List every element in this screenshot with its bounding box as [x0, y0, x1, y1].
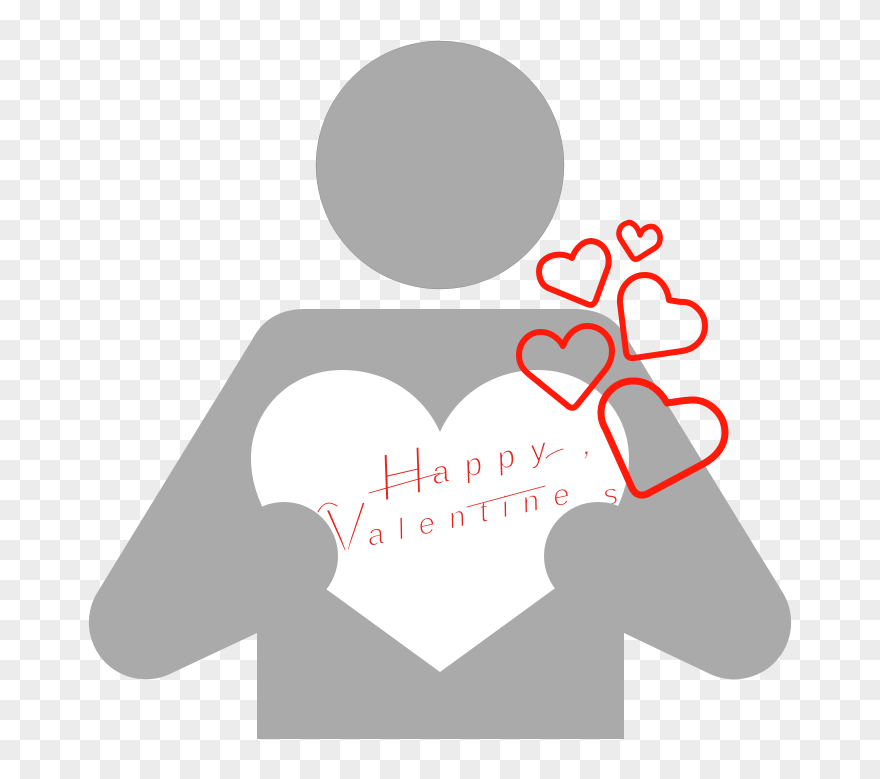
- left hand: [230, 502, 338, 610]
- text line: Valentine: alentine: [364, 475, 587, 553]
- text: final s: s: [600, 477, 621, 513]
- heart: small top: [619, 223, 660, 259]
- handwriting flourishes: [318, 449, 563, 512]
- text line: Happy: H: [368, 430, 435, 518]
- person body and arms: [89, 309, 791, 739]
- floating red outline hearts: [519, 223, 725, 495]
- white heart held by the person: [251, 370, 629, 672]
- heart: large bottom: [601, 381, 725, 495]
- heart: middle left: [519, 326, 612, 408]
- right hand: [544, 502, 652, 610]
- heart: right: [620, 275, 705, 358]
- icon: person holding a heart: [89, 41, 791, 739]
- apostrophe mark: ’: [580, 443, 589, 484]
- text line: Happy: appy: [427, 427, 565, 492]
- person head: [316, 41, 564, 289]
- heart: upper left: [539, 241, 609, 305]
- text line: Valentine: V: [315, 487, 375, 571]
- greeting text: Happy Valentine's: [315, 399, 621, 571]
